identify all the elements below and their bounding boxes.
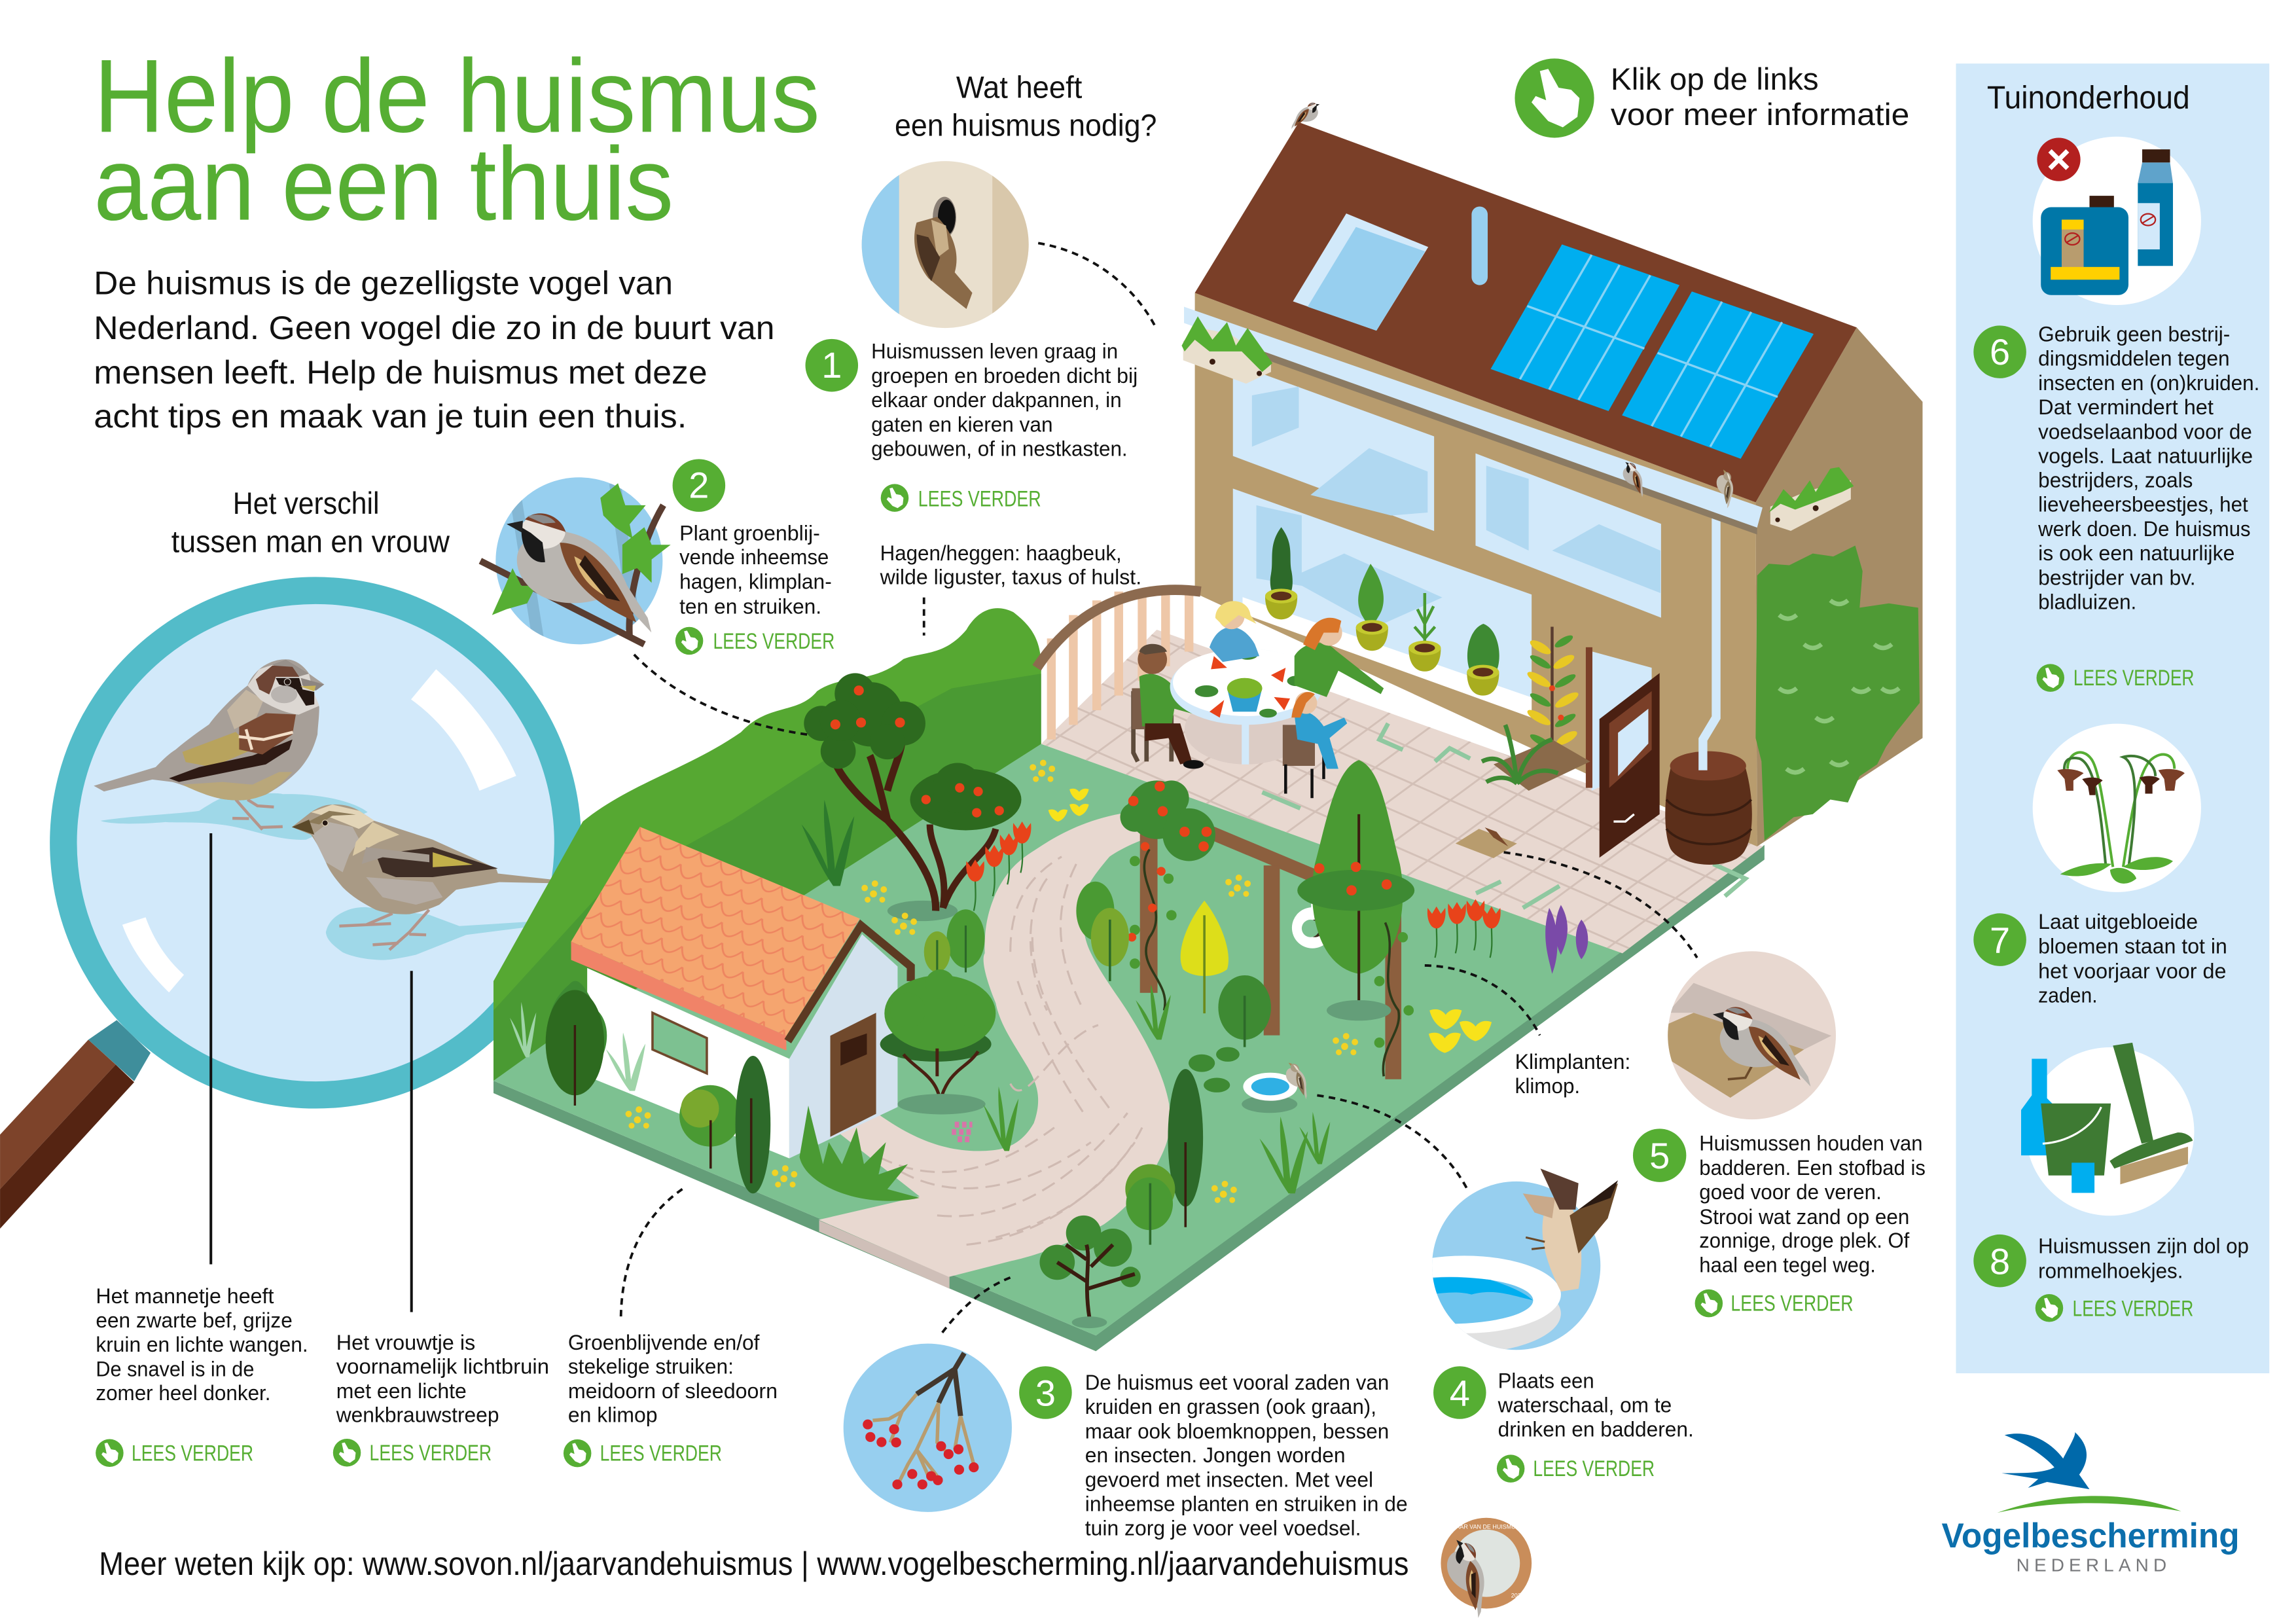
text 3: en insecten. Jongen worden [1085, 1443, 1346, 1467]
glass glare [122, 669, 516, 992]
house [1181, 101, 1922, 865]
nest box left [1181, 316, 1272, 384]
patio [1041, 630, 1763, 953]
text 6: bladluizen. [2038, 590, 2136, 613]
dashed line 2 [634, 655, 811, 735]
male sparrow [94, 659, 368, 840]
text: mannetje: zomer heel donker. [96, 1381, 270, 1405]
lees verder: struiken [564, 1439, 722, 1467]
lees verder 8 [2036, 1294, 2193, 1322]
stamp: jaar van de huismus [1431, 1518, 1532, 1618]
text 6: bestrijders, zoals [2038, 469, 2193, 492]
upper left window [1233, 363, 1434, 531]
text 4: waterschaal, om te [1498, 1394, 1672, 1417]
dashed line 5 [1504, 852, 1697, 958]
dashed line klimplanten [1425, 965, 1540, 1036]
stamp: jaar van de huismus: JAAR VAN DE HUISMUS [1453, 1524, 1520, 1530]
shed [571, 827, 911, 1159]
text: groenblijvende struiken: en klimop [568, 1403, 658, 1427]
intro text: De huismus is de gezelligste vogel van [94, 264, 673, 302]
click instruction: Klik op de links [1611, 62, 1819, 96]
text 6: is ook een natuurlijke [2038, 541, 2234, 565]
lower window [1233, 488, 1532, 717]
text 7 [2038, 910, 2227, 1007]
click instruction [1515, 58, 1909, 137]
heading: het verschil: Het verschil [233, 486, 379, 520]
plant beside door [1526, 627, 1581, 776]
heading: het verschil [171, 486, 450, 558]
panel heading: Tuinonderhoud [1987, 80, 2190, 116]
text 4 [1498, 1369, 1694, 1441]
panel: tuinonderhoud [1956, 63, 2269, 1373]
footer line: Meer weten kijk op: www.sovon.nl/jaarvandehuismus | www.vogelbescherming.nl/jaarvandehuismus [99, 1545, 1408, 1582]
garden platform [493, 744, 1765, 1351]
table [1170, 649, 1322, 765]
lees verder 2: LEES VERDER [713, 629, 834, 654]
text: groenblijvende struiken: meidoorn of sleedoorn [568, 1379, 778, 1403]
dashed line hagen [924, 598, 925, 636]
text 6: insecten en (on)kruiden. [2038, 371, 2259, 395]
text 3: gevoerd met insecten. Met veel [1085, 1468, 1373, 1491]
number 3 [1019, 1366, 1072, 1419]
text 8: Huismussen zijn dol op [2038, 1235, 2249, 1258]
text klimplanten: Klimplanten: [1515, 1050, 1630, 1074]
text 2: hagen, klimplan- [679, 569, 832, 593]
number 1: 1 [821, 344, 842, 386]
text: vrouwtje: Het vrouwtje is [336, 1331, 475, 1354]
agave plant [1482, 725, 1590, 791]
rain pipe [1703, 518, 1716, 770]
lees verder 4 [1497, 1454, 1655, 1483]
number 6 [1973, 325, 2026, 378]
lees verder 8: LEES VERDER [2073, 1297, 2193, 1322]
trees in back of garden [802, 673, 1021, 921]
intro text: acht tips en maak van je tuin een thuis. [94, 397, 687, 435]
ivy leaves [1779, 600, 1899, 772]
window plants [1265, 527, 1499, 696]
heading: wat heeft een huismus nodig: Wat heeft [956, 69, 1082, 104]
lees verder 2 [675, 627, 834, 655]
text 2: vende inheemse [679, 545, 829, 569]
text 2 [679, 522, 832, 618]
text: hagen [880, 541, 1141, 589]
title: Help de huismus [94, 37, 820, 154]
garden path [819, 813, 1170, 1289]
text 2: Plant groenblij- [679, 522, 820, 545]
lees verder 1 [881, 484, 1041, 512]
number 4 [1433, 1366, 1486, 1419]
text 3: kruiden en grassen (ook graan), [1085, 1395, 1376, 1418]
text 1: Huismussen leven graag in [871, 339, 1118, 363]
lees verder: vrouwtje [333, 1439, 492, 1467]
icon circle: berries [844, 1344, 1012, 1512]
lees verder 5: LEES VERDER [1731, 1291, 1854, 1316]
man [1138, 644, 1210, 769]
text klimplanten [1515, 1050, 1630, 1098]
line to male text [210, 833, 211, 1265]
lees verder 6 [2037, 664, 2194, 692]
roof vent [1471, 206, 1488, 285]
logo: vogelbescherming nederland: Vogelbescherming [1942, 1517, 2240, 1555]
lees verder 5 [1695, 1290, 1854, 1317]
hedge [493, 608, 1041, 1081]
text 6: werk doen. De huismus [2037, 517, 2251, 541]
side wall [1755, 327, 1922, 846]
dashed line 4 [1317, 1095, 1467, 1189]
pergola with climbing plant [1120, 780, 1401, 1079]
text 5: haal een tegel weg. [1699, 1253, 1876, 1276]
intro text: mensen leeft. Help de huismus met deze [94, 353, 708, 391]
icon circle: nest hole [861, 160, 1032, 329]
birds on roof [1286, 101, 1744, 509]
lees verder 4: LEES VERDER [1533, 1456, 1655, 1481]
lees verder: vrouwtje: LEES VERDER [370, 1441, 492, 1466]
patio dining scene [1132, 601, 1384, 798]
text: vrouwtje: wenkbrauwstreep [336, 1403, 499, 1427]
number 2 [673, 459, 725, 512]
text 8: rommelhoekjes. [2038, 1259, 2183, 1282]
text 1: gaten en kieren van [871, 412, 1053, 436]
text 8 [2038, 1235, 2249, 1282]
roof [1195, 122, 1857, 502]
text 3 [1085, 1371, 1408, 1540]
text 3: De huismus eet vooral zaden van [1085, 1371, 1389, 1394]
text: vrouwtje: met een lichte [336, 1379, 467, 1403]
lees verder: mannetje [96, 1439, 253, 1467]
stamp: jaar van de huismus: 2024 [1511, 1593, 1524, 1599]
female sparrow [292, 804, 565, 960]
upper right window [1475, 454, 1661, 618]
text: mannetje: Het mannetje heeft [96, 1284, 274, 1308]
number 5 [1633, 1128, 1686, 1182]
gutter [1184, 307, 1763, 535]
text 2: ten en struiken. [679, 594, 821, 618]
heading: wat heeft een huismus nodig [895, 69, 1157, 143]
title [94, 37, 820, 242]
number 5: 5 [1649, 1135, 1670, 1176]
text 5 [1699, 1132, 1926, 1276]
text: hagen: wilde liguster, taxus of hulst. [880, 566, 1141, 589]
number 8 [1973, 1235, 2026, 1287]
icon: bucket and broom [2021, 1043, 2194, 1216]
icon: faded flowers [2033, 724, 2201, 892]
icon: pesticide bottles [2033, 137, 2201, 305]
number 6: 6 [1990, 331, 2010, 372]
text 4: Plaats een [1498, 1369, 1594, 1393]
text: groenblijvende struiken: stekelige struiken: [568, 1354, 734, 1378]
number 7 [1973, 913, 2026, 966]
intro text [94, 264, 775, 435]
dashed line 3 [942, 1277, 1012, 1333]
text: vrouwtje: voornamelijk lichtbruin [336, 1354, 549, 1378]
door [1586, 647, 1660, 857]
bird bath [1242, 1060, 1319, 1113]
rain barrel [1665, 751, 1752, 865]
text 7: bloemen staan tot in [2038, 935, 2227, 958]
chair man [1134, 691, 1172, 761]
dashed line: struiken [621, 1189, 683, 1321]
right garden plants [1039, 760, 1414, 1328]
lees verder 1: LEES VERDER [918, 486, 1041, 511]
text 6: Dat vermindert het [2038, 395, 2214, 419]
text 7: het voorjaar voor de [2038, 959, 2226, 983]
number 3: 3 [1035, 1373, 1056, 1414]
text 4: drinken en badderen. [1498, 1418, 1694, 1441]
text 1: gebouwen, of in nestkasten. [871, 437, 1128, 461]
nest box right [1769, 467, 1854, 531]
woman blonde [1210, 601, 1259, 662]
text 3: tuin zorg je voor veel voedsel. [1085, 1516, 1361, 1540]
text klimplanten: klimop. [1515, 1074, 1580, 1098]
magnifying glass with male and female sparrow [0, 577, 581, 1229]
trees and shrubs around shed [510, 909, 1018, 1201]
lees verder 6: LEES VERDER [2073, 666, 2194, 691]
text 3: maar ook bloemknoppen, bessen [1085, 1419, 1389, 1443]
click instruction: voor meer informatie [1611, 97, 1909, 132]
text 6 [2037, 322, 2259, 613]
number 2: 2 [689, 465, 709, 506]
text 6: dingsmiddelen tegen [2038, 347, 2230, 370]
text 1 [871, 339, 1138, 461]
text: hagen: Hagen/heggen: haagbeuk, [880, 541, 1122, 565]
ivy [1755, 546, 1920, 840]
number 7: 7 [1990, 919, 2010, 960]
text 6: Gebruik geen bestrij- [2038, 322, 2230, 346]
text 6: bestrijder van bv. [2038, 566, 2196, 589]
text 5: zonnige, droge plek. Of [1699, 1229, 1910, 1252]
icon circle: water bowl [1432, 1168, 1618, 1350]
text 7: zaden. [2038, 984, 2098, 1007]
text 1: groepen en broeden dicht bij [871, 364, 1138, 388]
number 8: 8 [1990, 1240, 2010, 1282]
title: aan een thuis [94, 126, 673, 242]
logo: vogelbescherming nederland: NEDERLAND [2017, 1555, 2166, 1575]
number 1 [806, 339, 858, 391]
text 3: inheemse planten en struiken in de [1085, 1492, 1408, 1516]
woman red hair [1295, 618, 1384, 697]
intro text: Nederland. Geen vogel die zo in de buurt van [94, 309, 775, 346]
text: mannetje [96, 1284, 308, 1405]
text 6: vogels. Laat natuurlijke [2038, 444, 2253, 467]
text: groenblijvende struiken: Groenblijvende en/of [568, 1331, 760, 1354]
text: vrouwtje [336, 1331, 549, 1427]
text 5: Strooi wat zand op een [1699, 1205, 1909, 1229]
icon circle: sparrow on branch [480, 477, 672, 644]
logo: vogelbescherming nederland [1942, 1432, 2240, 1575]
line to female text [411, 971, 412, 1312]
lees verder: struiken: LEES VERDER [600, 1441, 722, 1466]
text 5: badderen. Een stofbad is [1699, 1156, 1926, 1180]
text 5: goed voor de veren. [1699, 1180, 1882, 1204]
dashed line 1 [1038, 243, 1157, 329]
text 6: lieveheersbeestjes, het [2038, 493, 2248, 516]
lees verder: mannetje: LEES VERDER [132, 1441, 253, 1466]
text: mannetje: kruin en lichte wangen. [96, 1333, 308, 1356]
number 4: 4 [1450, 1373, 1470, 1414]
text: groenblijvende struiken [568, 1331, 778, 1427]
text 1: elkaar onder dakpannen, in [871, 388, 1122, 412]
text: mannetje: een zwarte bef, grijze [96, 1308, 293, 1332]
text 5: Huismussen houden van [1699, 1132, 1922, 1155]
child [1283, 692, 1347, 798]
icon circle: dust bath [1666, 950, 1839, 1123]
roof window [1293, 213, 1428, 331]
front wall [1195, 293, 1757, 846]
heading: het verschil: tussen man en vrouw [171, 524, 450, 558]
text 6: voedselaanbod voor de [2038, 420, 2252, 443]
flowers [626, 760, 1588, 1203]
text: mannetje: De snavel is in de [96, 1357, 254, 1380]
heading: wat heeft een huismus nodig: een huismus nodig? [895, 108, 1157, 143]
fence [1037, 588, 1201, 740]
solar panels [1490, 244, 1814, 459]
text 7: Laat uitgebloeide [2038, 910, 2198, 933]
